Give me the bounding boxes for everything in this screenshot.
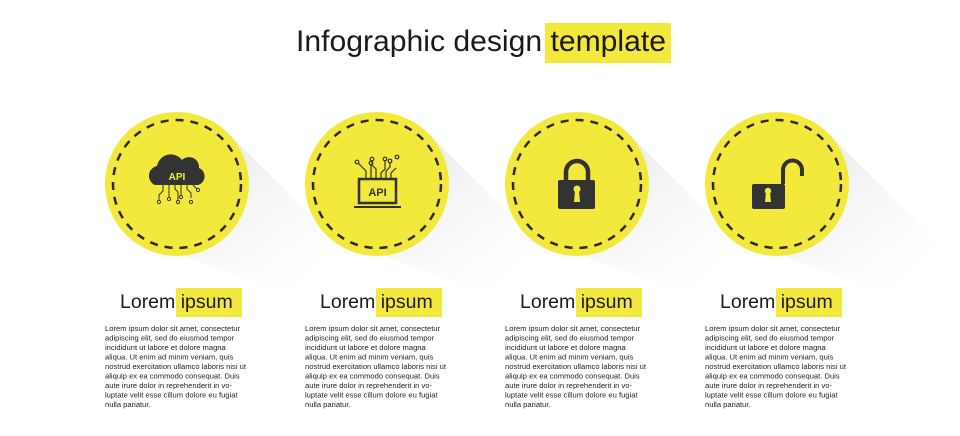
text block: incididunt ut labore et dolore magna <box>505 343 627 352</box>
text block: nostrud exercitation ullamco laboris nisi ut <box>705 362 847 371</box>
text block: aute irure dolor in reprehenderit in vo- <box>705 381 833 390</box>
text block: adipiscing elit, sed do eiusmod tempor <box>305 334 435 342</box>
text block: aliqua. Ut enim ad minim veniam, quis <box>105 352 234 362</box>
text block: Lorem ipsum dolor sit amet, consectetur <box>705 324 841 333</box>
text block: incididunt ut labore et dolore magna <box>705 343 827 352</box>
icon: open padlock <box>752 160 802 209</box>
text block: adipiscing elit, sed do eiusmod tempor <box>505 334 635 342</box>
text block: aliquip ex ea commodo consequat. Duis <box>105 372 240 380</box>
text block: nostrud exercitation ullamco laboris nisi ut <box>505 362 647 371</box>
text block <box>305 324 447 409</box>
text block: nulla pariatur. <box>505 400 551 409</box>
panel: step 2 laptop API <box>305 112 540 409</box>
text block: adipiscing elit, sed do eiusmod tempor <box>105 334 235 342</box>
text block <box>505 324 647 409</box>
text block: aliqua. Ut enim ad minim veniam, quis <box>705 352 834 362</box>
icon: laptop API: API <box>368 187 387 199</box>
text block: aute irure dolor in reprehenderit in vo- <box>305 381 433 390</box>
text block: incididunt ut labore et dolore magna <box>305 343 427 352</box>
text block: aute irure dolor in reprehenderit in vo- <box>105 381 233 390</box>
text block: nulla pariatur. <box>105 400 151 409</box>
text block: aliqua. Ut enim ad minim veniam, quis <box>305 352 434 362</box>
icon: laptop API <box>354 155 401 207</box>
text block: nostrud exercitation ullamco laboris nisi ut <box>305 362 447 371</box>
text block: Lorem ipsum dolor sit amet, consectetur <box>505 324 641 333</box>
text block: luptate velit esse cillum dolore eu fugiat <box>705 390 838 400</box>
text block: luptate velit esse cillum dolore eu fugiat <box>505 390 638 400</box>
panel: step 1 cloud API <box>105 112 340 409</box>
text block: aliquip ex ea commodo consequat. Duis <box>705 372 840 380</box>
text block: aliquip ex ea commodo consequat. Duis <box>505 372 640 380</box>
panel: step 3 closed lock <box>505 112 740 409</box>
icon: cloud API <box>149 154 205 204</box>
text block: nulla pariatur. <box>305 400 351 409</box>
text block: adipiscing elit, sed do eiusmod tempor <box>705 334 835 342</box>
icon: closed padlock <box>558 161 595 209</box>
panel: step 4 open lock <box>705 112 940 409</box>
text block <box>105 324 247 409</box>
text block: Lorem ipsum dolor sit amet, consectetur <box>305 324 441 333</box>
text block: incididunt ut labore et dolore magna <box>105 343 227 352</box>
text block: nulla pariatur. <box>705 400 751 409</box>
title: Infographic design template <box>296 25 666 58</box>
heading: Lorem ipsum <box>720 291 833 313</box>
icon: cloud API: API <box>169 172 186 183</box>
text block: nostrud exercitation ullamco laboris nisi ut <box>105 362 247 371</box>
text block: aute irure dolor in reprehenderit in vo- <box>505 381 633 390</box>
text block <box>705 324 847 409</box>
text block: aliquip ex ea commodo consequat. Duis <box>305 372 440 380</box>
text block: luptate velit esse cillum dolore eu fugiat <box>305 390 438 400</box>
heading: Lorem ipsum <box>520 291 633 313</box>
heading: Lorem ipsum <box>120 291 233 313</box>
text block: luptate velit esse cillum dolore eu fugiat <box>105 390 238 400</box>
heading: Lorem ipsum <box>320 291 433 313</box>
text block: aliqua. Ut enim ad minim veniam, quis <box>505 352 634 362</box>
text block: Lorem ipsum dolor sit amet, consectetur <box>105 324 241 333</box>
